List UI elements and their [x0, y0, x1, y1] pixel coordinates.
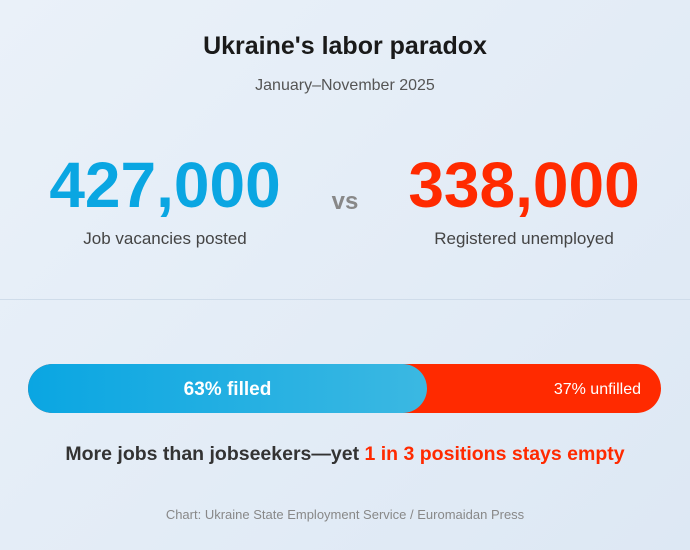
- progress bar: [28, 364, 661, 413]
- source footer: Chart: Ukraine State Employment Service / Euromaidan Press: [166, 507, 524, 522]
- bar: unfilled label: 37% unfilled: [554, 381, 641, 398]
- title: Ukraine's labor paradox: [203, 32, 487, 60]
- stat: unemployed: 338,000: [408, 149, 640, 221]
- bar: filled segment: [28, 364, 427, 413]
- stat: vacancies: 427,000: [49, 149, 281, 221]
- stat: vacancies: Job vacancies posted: [83, 229, 247, 248]
- takeaway text: More jobs than jobseekers—yet 1 in 3 positions stays empty: [65, 443, 625, 465]
- stat: unemployed: Registered unemployed: [434, 229, 614, 248]
- subtitle: January–November 2025: [255, 77, 435, 94]
- vs label: vs: [332, 188, 358, 215]
- bar: filled segment: 63% filled: [184, 379, 271, 400]
